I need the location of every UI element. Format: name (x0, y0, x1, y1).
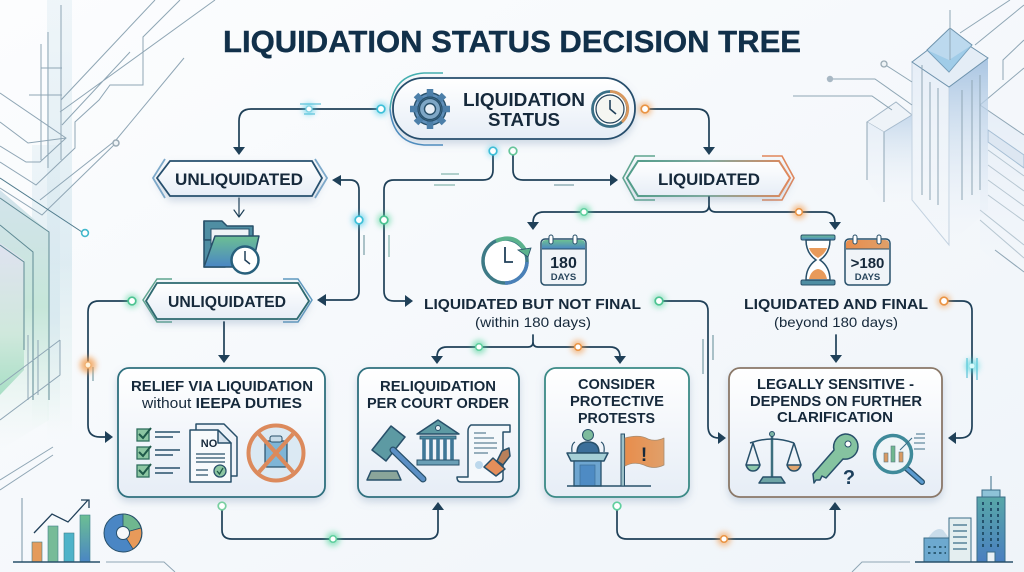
decoration: right buildings (793, 0, 1024, 290)
connector: root to unliquidated (233, 102, 388, 155)
connector: final to legally sensitive right route (937, 294, 979, 444)
icon: bar chart with trend (13, 498, 100, 562)
icon: checklist (137, 428, 180, 477)
icon: signed scroll (457, 425, 510, 482)
arrow: unliquidated down to relief (218, 322, 230, 363)
connector: unliquidated loop (317, 175, 366, 306)
icon: city skyline (852, 476, 1013, 572)
decoration: left circuit and polygons (0, 0, 215, 572)
panel text: protests: PROTESTS (578, 410, 655, 427)
icon: key with question mark: ? (843, 467, 855, 489)
panel text: legally sensitive: DEPENDS ON FURTHER (750, 393, 922, 410)
root label: LIQUIDATION (463, 90, 585, 110)
connector: root down to liquidated but not final (377, 145, 499, 307)
panel text: reliquidation (367, 378, 509, 412)
icon: calendar over 180 days: >180 (851, 255, 884, 272)
panel: legally sensitive (729, 368, 942, 497)
arrow: final down to legally sensitive (830, 335, 842, 363)
icon: podium speaker (567, 430, 608, 486)
text: liquidated but not final (424, 296, 641, 330)
root node: liquidation status (390, 73, 635, 145)
text: liquidated and final: (beyond 180 days) (774, 314, 898, 330)
decision: unliquidated second: UNLIQUIDATED (168, 294, 286, 311)
icon: scales (746, 432, 801, 483)
panel text: legally sensitive: LEGALLY SENSITIVE - (757, 376, 914, 393)
panel: relief via liquidation (118, 368, 325, 497)
text: liquidated but not final: (within 180 days) (475, 314, 591, 330)
icon: magnifier chart (874, 434, 925, 482)
panel text: relief: without IEEPA DUTIES (141, 395, 302, 412)
icon: warning flag: ! (641, 445, 647, 466)
connector: unliquidated to relief left route (80, 294, 139, 443)
connector: not final split (431, 335, 626, 364)
panel text: reliquidation: RELIQUIDATION (380, 378, 496, 395)
panel text: reliquidation: PER COURT ORDER (367, 395, 509, 412)
icon: no document (190, 424, 237, 482)
icon: donut chart (104, 514, 142, 552)
icon: clock (592, 91, 628, 126)
root label: STATUS (488, 110, 560, 130)
text: liquidated and final: LIQUIDATED AND FINAL (744, 296, 928, 313)
panel text: relief: RELIEF VIA LIQUIDATION (131, 378, 313, 395)
panel: consider protective protests (545, 368, 689, 497)
panel: reliquidation per court order (358, 368, 519, 497)
connector: root down to liquidated right (509, 147, 618, 186)
icon: warning flag (567, 434, 664, 486)
icon: key with question mark (813, 434, 858, 489)
icon: calendar 180 days: DAYS (551, 272, 576, 283)
icon: hourglass (801, 235, 835, 285)
title: LIQUIDATION STATUS DECISION TREE (223, 24, 801, 59)
icon: clock with arrow (483, 238, 531, 283)
decision: unliquidated top: UNLIQUIDATED (175, 170, 303, 189)
connector: not final to legally sensitive (652, 294, 726, 444)
icon: prohibited clipboard (248, 426, 304, 480)
panel text: protests: CONSIDER (578, 376, 655, 393)
decision: unliquidated top (153, 159, 327, 198)
icon: calendar over 180 days (845, 235, 890, 285)
icon: courthouse (417, 420, 459, 465)
icon: folder with clock (204, 221, 259, 274)
icon: calendar 180 days (541, 235, 586, 285)
icon: calendar 180 days: 180 (550, 255, 577, 272)
decision: liquidated (623, 156, 794, 200)
decision: unliquidated second (143, 279, 312, 322)
icon: gear (410, 89, 450, 129)
arrow: unliquidated to folder (234, 198, 244, 217)
icon: no document: NO (201, 438, 218, 450)
connector: relief to reliquidation (218, 502, 444, 546)
connector: liquidated split (527, 197, 841, 230)
icon: gavel (367, 426, 423, 480)
connector: protests to legally sensitive (613, 502, 841, 546)
icon: calendar over 180 days: DAYS (855, 272, 880, 283)
text: liquidated and final (744, 296, 928, 330)
panel text: relief (131, 378, 313, 412)
panel text: protests: PROTECTIVE (570, 393, 664, 410)
connector: root to liquidated (638, 102, 715, 155)
text: liquidated but not final: LIQUIDATED BUT NOT FINAL (424, 296, 641, 313)
panel text: legally sensitive: CLARIFICATION (777, 409, 893, 426)
decision: liquidated: LIQUIDATED (658, 170, 760, 189)
